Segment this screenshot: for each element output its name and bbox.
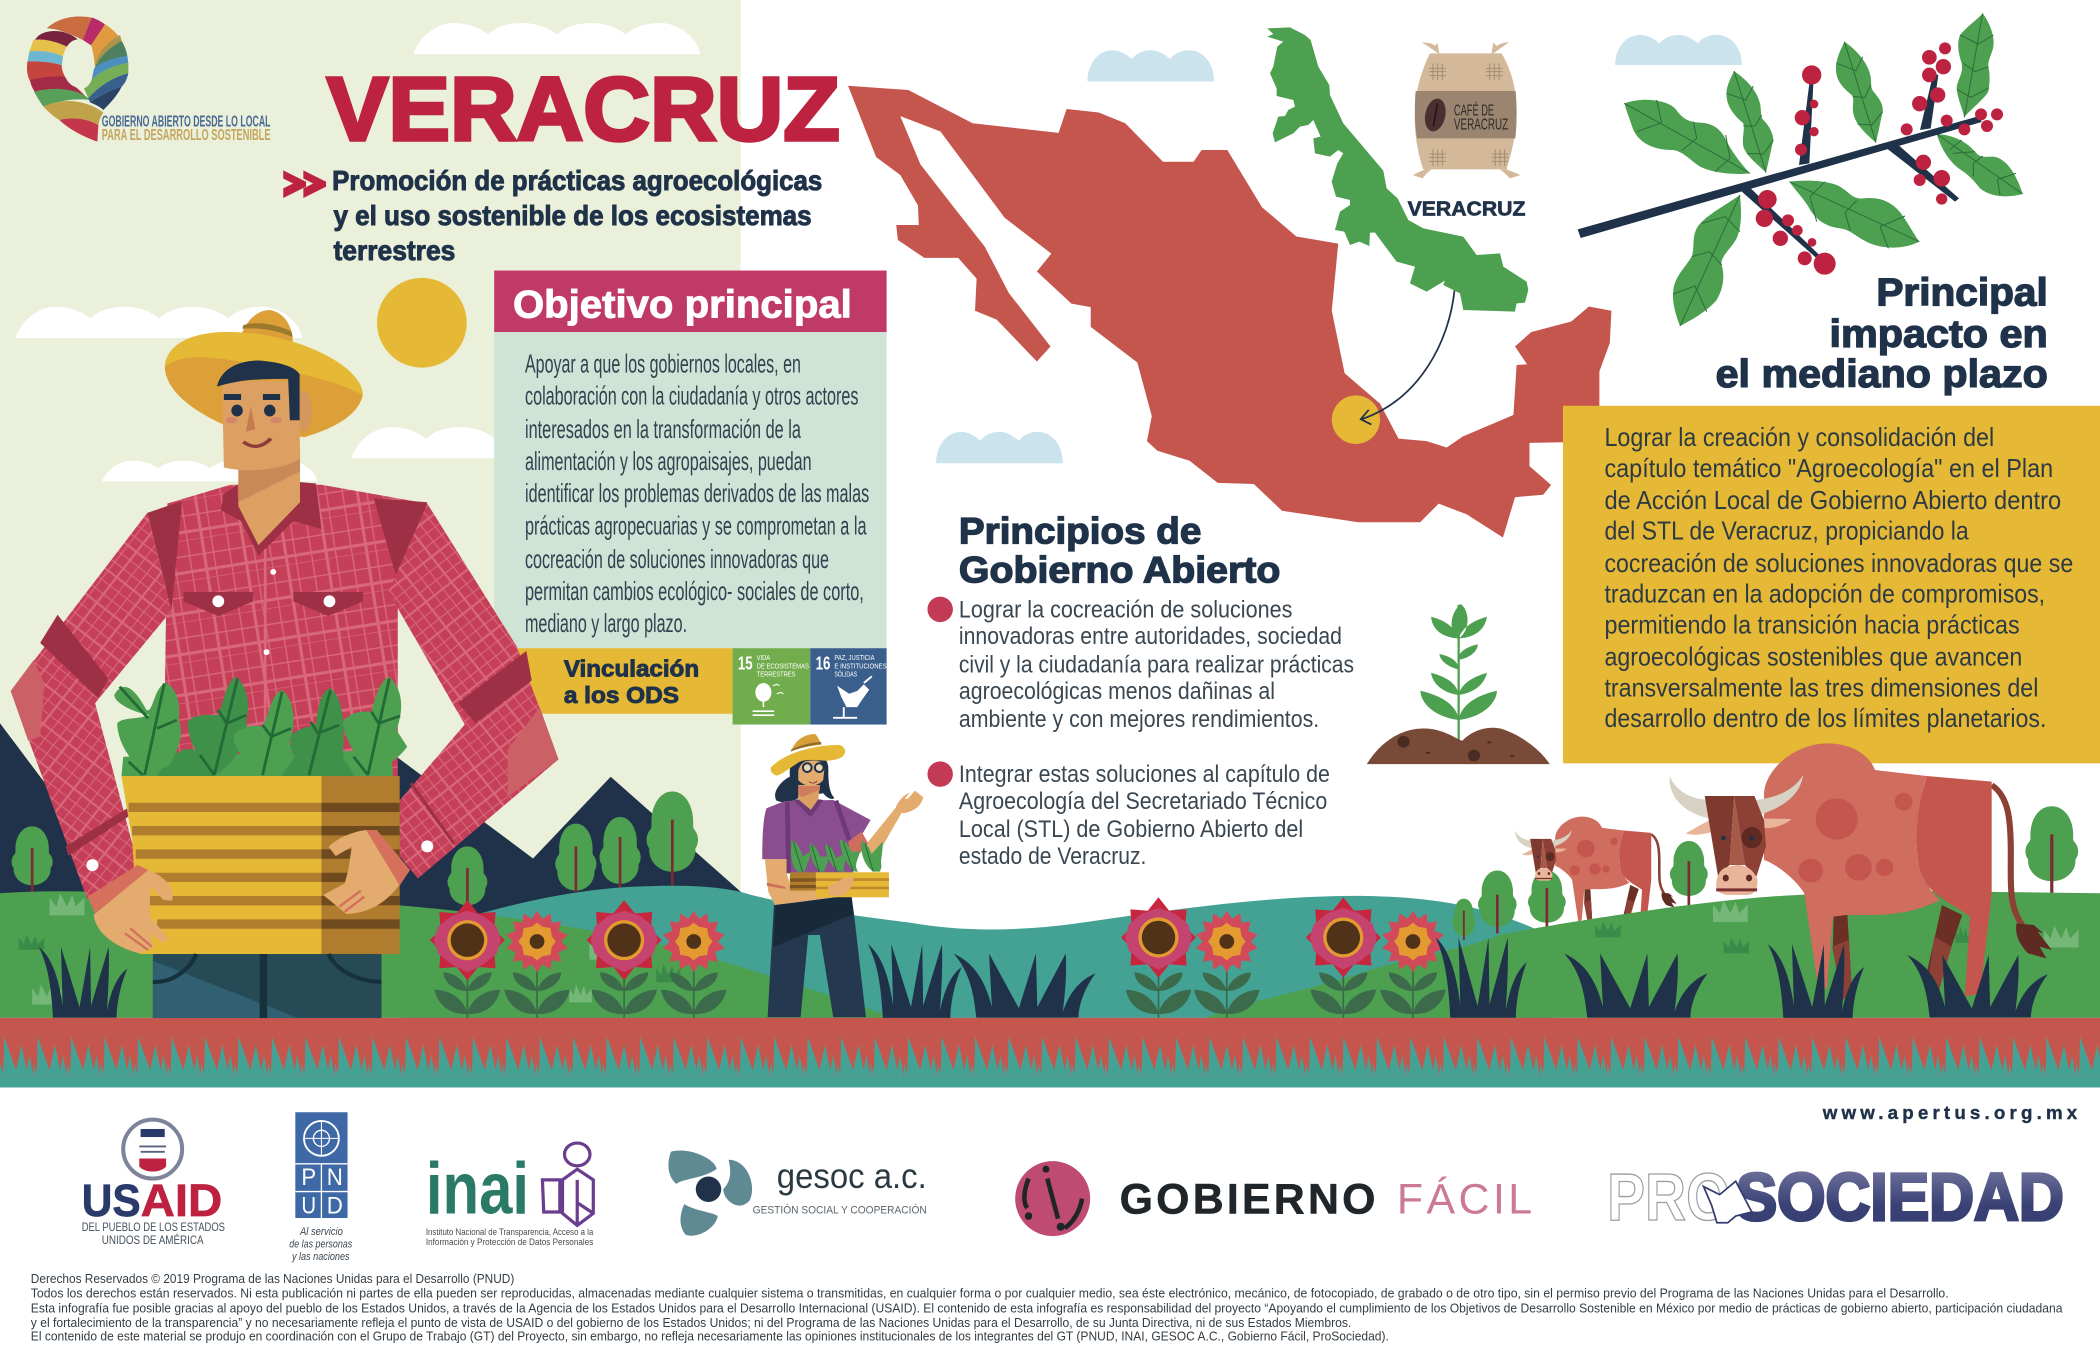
panel: objetivo principal: cocreación de soluciones innovadoras que <box>525 546 829 574</box>
right trees <box>1452 806 2078 940</box>
neck <box>238 458 300 549</box>
green hills <box>0 891 2100 1018</box>
logo: inai: inai <box>426 1146 529 1229</box>
logo: PNUD: y las naciones <box>291 1251 350 1263</box>
subtitle: terrestres <box>333 235 455 266</box>
head <box>165 310 363 470</box>
panel: objetivo principal: mediano y largo plazo. <box>525 610 687 638</box>
ODS 16: SÓLIDAS <box>834 669 857 678</box>
principle 2: Local (STL) de Gobierno Abierto del <box>959 816 1303 843</box>
panel: principal impacto: de Acción Local de Gobierno Abierto dentro <box>1604 487 2061 515</box>
teal hills <box>402 886 1554 1018</box>
logo: PNUD: D <box>327 1192 343 1219</box>
seal <box>123 1120 182 1179</box>
panel: vinculacion a los ODS <box>516 648 887 725</box>
left trees <box>12 791 698 908</box>
heading: principal impacto: impacto en <box>1829 313 2048 356</box>
shoulder straps <box>147 498 427 611</box>
principle 2 <box>927 761 1330 870</box>
illustration: small cow <box>1515 817 1677 925</box>
illustration: big cow <box>1669 743 2052 1000</box>
panel: principal impacto: permitiendo la transición hacia prácticas <box>1604 611 2020 639</box>
panel: vinculacion a los ODS: Vinculación <box>564 655 699 681</box>
ODS 15 <box>733 648 810 725</box>
logo: PNUD: P <box>301 1164 316 1191</box>
principle 1: ambiente y con mejores rendimientos. <box>959 706 1319 733</box>
panel: principal impacto: traduzcan en la adopción de compromisos, <box>1604 581 2045 609</box>
principle 1: civil y la ciudadanía para realizar prácticas <box>959 651 1354 678</box>
panel: objetivo principal: Apoyar a que los gobiernos locales, en <box>525 350 801 378</box>
principle 1: innovadoras entre autoridades, sociedad <box>959 623 1342 650</box>
background grass tufts <box>19 889 2079 1004</box>
right arm <box>376 504 558 879</box>
logo: prosociedad: PRO <box>1607 1160 1730 1235</box>
logo: USAID: DEL PUEBLO DE LOS ESTADOS <box>82 1220 225 1234</box>
panel: principal impacto: desarrollo dentro de los límites planetarios. <box>1604 705 2046 733</box>
ODS 15: 15 <box>738 653 753 674</box>
ODS 15: DE ECOSISTEMAS <box>757 661 809 670</box>
logo: inai: Instituto Nacional de Transparencia, Acceso a la <box>426 1227 593 1237</box>
principle 1: agroecológicas menos dañinas al <box>959 678 1275 705</box>
ODS 16: E INSTITUCIONES <box>834 661 887 670</box>
ODS 15: VIDA <box>757 653 770 662</box>
panel: objetivo principal <box>494 271 887 648</box>
heading: principal impacto: Principal <box>1876 271 2048 314</box>
illustration: farmer holding crate <box>11 310 558 1018</box>
arrow to Veracruz location <box>1361 291 1454 425</box>
legal footer <box>31 1272 2063 1344</box>
logo: USAID <box>82 1120 225 1247</box>
logo: gesoc <box>668 1151 927 1236</box>
panel: objetivo principal: colaboración con la ciudadanía y otros actores <box>525 382 858 410</box>
logo: PNUD: N <box>327 1164 343 1191</box>
ODS 16: 16 <box>816 653 830 674</box>
farmer shirt body <box>163 485 427 790</box>
logo: inai: Información y Protección de Datos Personales <box>426 1237 594 1247</box>
left arm <box>11 513 171 899</box>
label: Veracruz: VERACRUZ <box>1408 198 1525 221</box>
leaves in crate <box>114 677 407 776</box>
heading: principios de gobierno abierto: Gobierno Abierto <box>959 549 1280 591</box>
logo: PNUD <box>289 1112 353 1263</box>
map of Mexico <box>848 86 1611 538</box>
subtitle: y el uso sostenible de los ecosistemas <box>333 200 812 231</box>
logo text: GOBIERNO ABIERTO DESDE LO LOCAL <box>102 113 271 131</box>
heading: principal impacto: el mediano plazo <box>1716 353 2048 396</box>
agave plants <box>39 937 2048 1018</box>
hands <box>88 830 410 953</box>
panel: objetivo principal: permitan cambios ecológico- sociales de corto, <box>525 578 864 606</box>
panel: principal impacto: del STL de Veracruz, propiciando la <box>1604 518 1970 546</box>
logo: USAID: UNIDOS DE AMÉRICA <box>102 1232 204 1247</box>
illustration: woman farmer <box>762 734 923 1017</box>
logo: gobierno facil: FÁCIL <box>1397 1175 1532 1223</box>
placket and buttons <box>264 549 266 790</box>
pockets <box>183 592 363 616</box>
logo: USAID: AID <box>141 1175 222 1226</box>
website url: www.apertus.org.mx <box>1822 1102 2078 1123</box>
red and teal band with grass <box>0 1018 2100 1087</box>
panel: objetivo principal: identificar los problemas derivados de las malas <box>525 480 869 508</box>
subtitle <box>284 165 822 266</box>
panel: principal impacto <box>1563 406 2100 763</box>
legal footer: Esta infografía fue posible gracias al apoyo del pueblo de los Estados Unidos, a través de la Agencia de los Estados Unidos para el Desarrollo Internacional (USAID). El contenido de esta infografía es responsabilidad del proyecto “Apoyando el cumplimiento de los Objetivos de Desarrollo Sostenible en México por medio de prácticas de gobierno abierto, participación ciudadana <box>31 1301 2063 1315</box>
panel: objetivo principal: prácticas agropecuarias y se comprometan a la <box>525 512 867 540</box>
subtitle: Promoción de prácticas agroecológicas <box>332 165 822 196</box>
principle 2: Agroecología del Secretariado Técnico <box>959 788 1327 815</box>
chevrons <box>284 171 325 197</box>
logo: PNUD: de las personas <box>289 1239 353 1251</box>
icon: person with book <box>542 1143 593 1225</box>
flowers <box>430 897 1446 1018</box>
panel: principal impacto: capítulo temático "Agroecología" en el Plan <box>1604 455 2053 483</box>
logo: USAID: US <box>82 1175 141 1226</box>
logo: prosociedad <box>1607 1160 2064 1235</box>
logo: rainbow pin <box>27 17 271 144</box>
legal footer: El contenido de este material se produjo en coordinación con el Grupo de Trabajo (GT) del Proyecto, sin embargo, no refleja necesariamente las opiniones institucionales de los integrantes del GT (PNUD, INAI, GESOC A.C., Gobierno Fácil, ProSociedad). <box>31 1330 1389 1344</box>
jeans <box>153 954 381 1018</box>
principle 2: Integrar estas soluciones al capítulo de <box>959 761 1330 788</box>
icon: coffee sack <box>1413 42 1521 178</box>
logo: inai <box>426 1143 594 1247</box>
mountains <box>0 723 750 964</box>
panel header <box>494 271 887 332</box>
illustration: sprout <box>1367 604 1550 764</box>
ODS 16: PAZ, JUSTICIA <box>834 653 875 662</box>
legal footer: Todos los derechos están reservados. Ni esta publicación ni partes de ella pueden ser reproducidas, almacenadas mediante cualquier sistema o transmitidas, en cualquier forma o por cualquier medio, sea éste electrónico, mecánico, de fotocopiado, de grabado o de otro tipo, sin el permiso previo del Programa de las Naciones Unidas para el Desarrollo. <box>31 1287 1949 1301</box>
principle 1 <box>927 596 1354 733</box>
logo: gobierno facil: GOBIERNO <box>1120 1175 1375 1223</box>
panel: principal impacto: Lograr la creación y consolidación del <box>1604 424 1994 452</box>
illustration: coffee branch <box>1578 13 2023 326</box>
icon: coffee sack: CAFÉ DE <box>1454 101 1494 120</box>
panel: vinculacion a los ODS: a los ODS <box>564 682 679 708</box>
logo: gesoc: gesoc a.c. <box>777 1157 927 1196</box>
map of Veracruz state <box>1267 27 1528 312</box>
panel: objetivo principal: Objetivo principal <box>513 283 852 326</box>
panel: objetivo principal: interesados en la transformación de la <box>525 416 801 444</box>
light green left backdrop <box>0 0 741 937</box>
heading: principios de gobierno abierto <box>959 510 1280 591</box>
crate <box>121 776 400 954</box>
logo: rainbow pin: PARA EL DESARROLLO SOSTENIBLE <box>102 126 271 144</box>
ODS 15: TERRESTRES <box>757 669 796 678</box>
logo: gesoc: GESTIÓN SOCIAL Y COOPERACIÓN <box>753 1203 927 1216</box>
logo: prosociedad: SOCIEDAD <box>1736 1160 2064 1235</box>
ODS 16 <box>810 648 887 725</box>
blue clouds <box>936 35 1742 463</box>
panel: principal impacto: transversalmente las tres dimensiones del <box>1604 674 2038 702</box>
principle 1: Lograr la cocreación de soluciones <box>959 596 1292 623</box>
legal footer: y el fortalecimiento de la transparencia” y no necesariamente refleja el punto de vista de USAID o del gobierno de los Estados Unidos; ni del Programa de las Naciones Unidas para el Desarrollo, de su Junta Directiva, ni de sus Estados Miembros. <box>31 1316 1351 1330</box>
clouds on light green backdrop <box>15 23 700 481</box>
panel: principal impacto: agroecológicas sostenibles que avancen <box>1604 644 2022 672</box>
principle 2: estado de Veracruz. <box>959 843 1146 870</box>
heading: principios de gobierno abierto: Principios de <box>959 510 1201 552</box>
logo: gobierno facil <box>1015 1161 1532 1236</box>
heading: principal impacto <box>1716 271 2048 396</box>
legal footer: Derechos Reservados © 2019 Programa de las Naciones Unidas para el Desarrollo (PNUD) <box>31 1272 514 1286</box>
collar <box>221 482 321 556</box>
logo: PNUD: U <box>301 1192 316 1219</box>
panel: objetivo principal: alimentación y los agropaisajes, puedan <box>525 448 812 476</box>
logo: PNUD: Al servicio <box>299 1226 343 1238</box>
icon: coffee sack: VERACRUZ <box>1454 115 1508 133</box>
title: VERACRUZ <box>327 60 840 160</box>
sun <box>377 278 467 368</box>
